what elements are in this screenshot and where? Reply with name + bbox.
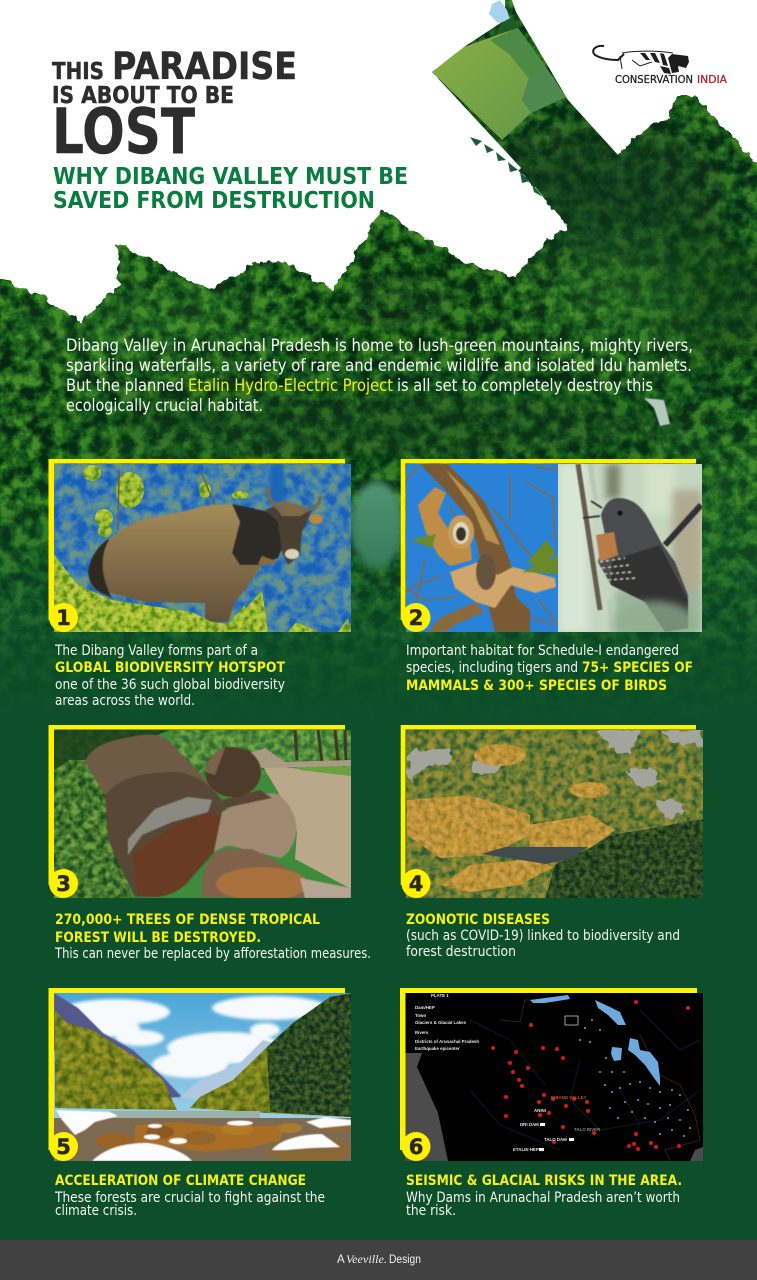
title: PARADISE (112, 45, 297, 88)
panel 6 (400, 988, 703, 1219)
badge 1: 1 (56, 606, 71, 630)
foliage (83, 465, 248, 537)
text 6 (406, 1172, 682, 1219)
text 1: The Dibang Valley forms part of a (54, 643, 258, 659)
intro text: is all set to completely destroy this (397, 376, 653, 395)
badge 6: 6 (409, 1135, 423, 1159)
map: earthquakes and glaciers: Glaciers & Glacial Lakes (415, 1020, 467, 1025)
title: LOST (52, 95, 195, 168)
text 1: GLOBAL BIODIVERSITY HOTSPOT (55, 659, 285, 676)
photo: mountain lake (406, 730, 703, 899)
logo text: CONSERVATION (615, 74, 693, 86)
hill photo strip (432, 0, 566, 197)
intro text: But the planned (66, 376, 184, 395)
yellow frame (48, 459, 345, 620)
badge 2: 2 (409, 606, 423, 630)
yellow frame (401, 459, 696, 620)
text 1 (54, 643, 285, 709)
map: earthquakes and glaciers: ANINI (534, 1108, 546, 1113)
text 1: areas across the world. (55, 693, 195, 709)
text 6: Why Dams in Arunachal Pradesh aren’t worth (406, 1190, 680, 1206)
yellow frame (401, 725, 696, 885)
text 3: FOREST WILL BE DESTROYED. (55, 929, 261, 946)
badge 5: 5 (56, 1135, 71, 1159)
subtitle (53, 162, 408, 214)
badge 1 (49, 603, 78, 632)
text 5 (54, 1172, 325, 1219)
text 4: ZOONOTIC DISEASES (406, 911, 550, 928)
badge 3: 3 (56, 872, 71, 896)
text 4: (such as COVID-19) linked to biodiversity and (406, 928, 680, 944)
photo: river valley (54, 993, 355, 1163)
map: earthquakes and glaciers: PLATE 1 (431, 993, 449, 998)
yellow frame (48, 988, 345, 1150)
intro text: sparkling waterfalls, a variety of rare and endemic wildlife and isolated Idu hamlets. (66, 356, 692, 375)
title: IS ABOUT TO BE (52, 81, 234, 109)
footer: Veeville. (346, 1252, 387, 1266)
map: earthquakes and glaciers: Town (415, 1013, 426, 1018)
photo: bird (558, 464, 702, 649)
map: earthquakes and glaciers: Dam/HEP (415, 1005, 435, 1010)
text 2 (406, 643, 693, 694)
photo: takin (54, 464, 351, 632)
footer (0, 1240, 757, 1280)
icon: tiger (593, 46, 689, 74)
map: earthquakes and glaciers: TALO RIVER (574, 1127, 601, 1132)
logo text: INDIA (697, 74, 728, 86)
text 2: MAMMALS & 300+ SPECIES OF BIRDS (406, 677, 667, 694)
footer: A (337, 1254, 345, 1266)
text 3 (54, 911, 371, 962)
text 4: forest destruction (406, 944, 516, 960)
torn white header paper (0, 0, 570, 323)
panel 2 (401, 459, 702, 694)
text 4 (406, 911, 680, 960)
map: earthquakes and glaciers: Earthquake epicenter (415, 1046, 460, 1051)
badge 3 (49, 869, 78, 898)
logo: Conservation India (593, 46, 728, 86)
subtitle: WHY DIBANG VALLEY MUST BE (53, 162, 408, 190)
waterfall patch (644, 398, 670, 426)
badge 6 (402, 1132, 430, 1161)
river mist patch (350, 481, 404, 569)
intro text: ecologically crucial habitat. (66, 396, 263, 415)
map: earthquakes and glaciers: Districts of Arunachal Pradesh (415, 1039, 479, 1044)
map: earthquakes and glaciers: TALO DAM (544, 1137, 567, 1142)
badge 4: 4 (409, 872, 423, 896)
map: earthquakes and glaciers: DRI DAM (520, 1122, 539, 1127)
subtitle: SAVED FROM DESTRUCTION (53, 186, 375, 214)
title: THIS (52, 57, 104, 85)
text 3: 270,000+ TREES OF DENSE TROPICAL (55, 911, 320, 928)
panel 1 (48, 459, 351, 709)
text 2: 75+ SPECIES OF (582, 659, 693, 676)
panel 4 (401, 725, 703, 960)
text 1: one of the 36 such global biodiversity (55, 677, 285, 693)
title (52, 45, 297, 168)
text 5: ACCELERATION OF CLIMATE CHANGE (55, 1172, 306, 1189)
intro text: Etalin Hydro-Electric Project (188, 376, 394, 395)
badge 2 (402, 603, 430, 632)
text 5: These forests are crucial to fight against the (54, 1190, 325, 1206)
text 6: SEISMIC & GLACIAL RISKS IN THE AREA. (406, 1172, 682, 1189)
map: earthquakes and glaciers (405, 993, 703, 1161)
grass (54, 555, 252, 632)
text 2: species, including tigers and (406, 660, 578, 676)
torn white right corner (530, 0, 757, 175)
map: earthquakes and glaciers: ETALIN HEP (513, 1147, 539, 1152)
badge 4 (402, 869, 430, 898)
intro text (66, 336, 693, 415)
photo: felled logs (54, 730, 351, 901)
text 5: climate crisis. (55, 1203, 137, 1219)
forest fragments (470, 137, 543, 197)
panel 3 (48, 725, 371, 962)
text 3: This can never be replaced by afforestation measures. (54, 946, 371, 962)
map: earthquakes and glaciers: Rivers (415, 1030, 429, 1035)
panel 5 (48, 988, 355, 1219)
map: earthquakes and glaciers: DIBANG VALLEY (551, 1095, 587, 1100)
intro text: Dibang Valley in Arunachal Pradesh is home to lush-green mountains, mighty rivers, (66, 336, 693, 355)
text 2: Important habitat for Schedule-I endangered (406, 643, 679, 659)
yellow frame (400, 988, 697, 1150)
text 6: the risk. (406, 1203, 456, 1219)
badge 5 (49, 1132, 78, 1161)
yellow frame (48, 725, 345, 885)
footer: Design (389, 1254, 421, 1266)
photo: gibbon (406, 464, 558, 632)
